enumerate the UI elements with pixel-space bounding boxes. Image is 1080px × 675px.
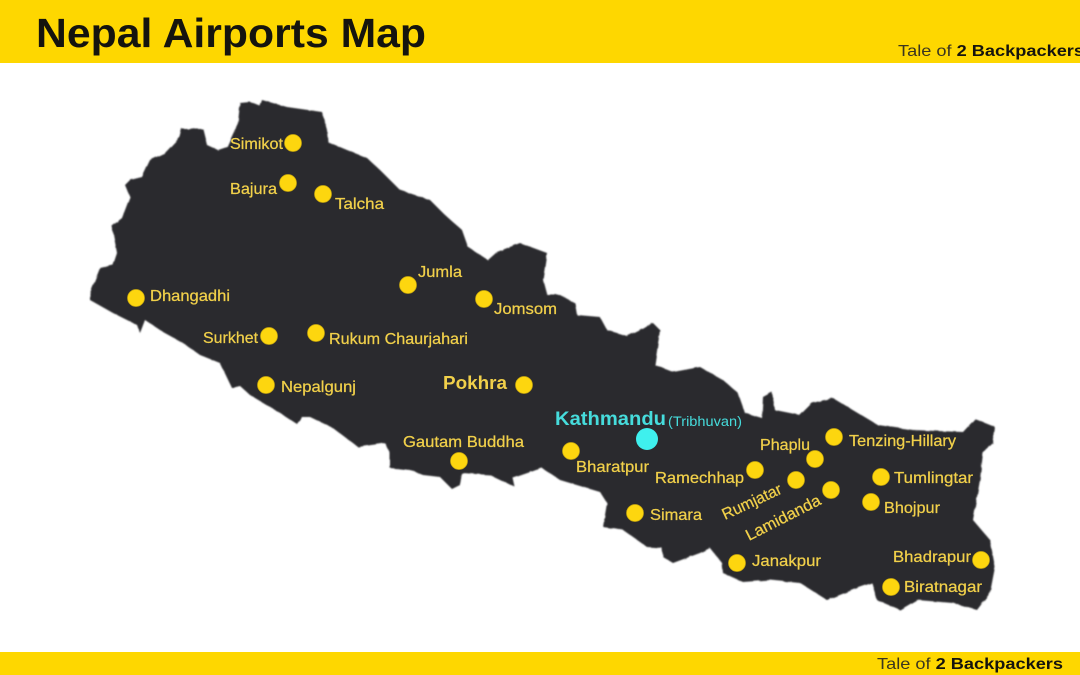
airport: Dhangadhi — [128, 288, 230, 306]
airport: Pokhra — [443, 372, 532, 394]
airport: Tumlingtar: Tumlingtar — [894, 470, 974, 487]
airport: Phaplu — [760, 437, 824, 468]
airport: Simikot — [230, 134, 302, 153]
airport: Bhojpur: Bhojpur — [884, 500, 941, 517]
airport: Bharatpur — [562, 442, 650, 476]
footer band — [0, 652, 1080, 675]
airport: Tumlingtar — [872, 468, 974, 487]
airport: Biratnagar: Biratnagar — [904, 579, 983, 596]
airport: Nepalgunj: Nepalgunj — [281, 379, 356, 396]
airport: Ramechhap: Ramechhap — [655, 470, 744, 487]
airport: Surkhet: Surkhet — [203, 330, 259, 347]
airport: Tenzing-Hillary: Tenzing-Hillary — [849, 433, 956, 450]
airport: Nepalgunj — [258, 376, 356, 396]
airport: Jumla — [400, 264, 462, 294]
airport: Dhangadhi: Dhangadhi — [150, 288, 230, 305]
brand credit: top: Tale of 2 Backpackers — [898, 43, 1080, 60]
airport: Rumjatar: Rumjatar — [720, 481, 785, 524]
airport: Jomsom: Jomsom — [494, 301, 557, 318]
airport: Rumjatar — [720, 472, 804, 524]
airport: Jumla: Jumla — [418, 264, 462, 281]
airport: Bhojpur — [862, 494, 941, 517]
airport: Lamidanda — [743, 482, 840, 545]
airport: Bharatpur: Bharatpur — [576, 459, 650, 476]
airport: Janakpur: Janakpur — [752, 553, 822, 570]
airport: Rukum Chaurjahari: Rukum Chaurjahari — [329, 331, 468, 348]
airport: Simara — [626, 504, 702, 524]
airport: Tenzing-Hillary — [826, 428, 956, 450]
title: Nepal Airports Map — [36, 10, 426, 56]
airport: Bajura — [230, 174, 296, 198]
airport: Rukum Chaurjahari — [308, 324, 468, 348]
airport: Bhadrapur — [893, 549, 990, 568]
airport: Talcha: Talcha — [335, 196, 384, 213]
airport: Talcha — [314, 186, 384, 213]
airport: Bajura: Bajura — [230, 181, 277, 198]
airport: Phaplu: Phaplu — [760, 437, 810, 454]
airport: Simara: Simara — [650, 507, 702, 524]
airport: Ramechhap — [655, 462, 764, 487]
airport: Jomsom — [476, 290, 557, 318]
airport: Lamidanda: Lamidanda — [743, 492, 824, 545]
map: Nepal silhouette — [90, 100, 995, 610]
airport: Pokhra: Pokhra — [443, 372, 508, 393]
airport: Gautam Buddha: Gautam Buddha — [403, 434, 524, 451]
brand credit: bottom: Tale of 2 Backpackers — [877, 656, 1063, 673]
airport: Bhadrapur: Bhadrapur — [893, 549, 972, 566]
header band — [0, 0, 1080, 63]
airport: Gautam Buddha — [403, 434, 524, 470]
airport: Simikot: Simikot — [230, 136, 284, 153]
airport: Surkhet — [203, 328, 278, 347]
airport: Kathmandu (Tribhuvan): Kathmandu — [555, 409, 666, 430]
airport: Kathmandu (Tribhuvan): (Tribhuvan) — [668, 414, 742, 429]
airport: Kathmandu (Tribhuvan) — [555, 409, 742, 450]
airport: Janakpur — [728, 553, 822, 572]
